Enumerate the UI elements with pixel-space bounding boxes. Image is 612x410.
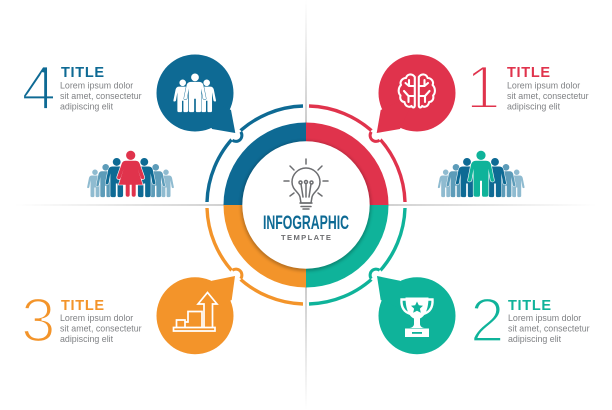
centre white circle — [242, 141, 370, 269]
number 2: 2 — [470, 286, 504, 356]
panel 3: orange section — [21, 276, 235, 356]
description 1: adipiscing elit — [507, 102, 561, 112]
central ring diagram — [207, 106, 405, 304]
description 2: Lorem ipsum dolor — [508, 313, 581, 323]
panel 4: blue section — [22, 54, 235, 133]
description 1 — [507, 81, 589, 112]
description 3: Lorem ipsum dolor — [60, 313, 133, 323]
inner circle shadow — [241, 141, 371, 271]
description 4: adipiscing elit — [60, 102, 114, 112]
outer ring segment: orange — [207, 208, 303, 304]
outer ring segment: blue — [207, 106, 303, 202]
speech bubble: blue — [156, 54, 235, 133]
description 4: sit amet, consectetur — [60, 91, 142, 101]
outer ring segment: teal — [309, 208, 405, 304]
connector: orange — [230, 268, 242, 282]
icon: rising bar chart — [174, 292, 217, 331]
description 2: adipiscing elit — [508, 334, 562, 344]
speech bubble: teal — [377, 276, 456, 354]
description 2 — [508, 313, 590, 344]
thick ring: orange — [223, 205, 306, 288]
title 2: TITLE — [508, 298, 552, 314]
number 4: 4 — [22, 54, 56, 123]
connector: teal — [370, 268, 382, 282]
icon: light bulb — [284, 159, 328, 209]
description 2: sit amet, consectetur — [508, 324, 590, 334]
title 3: TITLE — [61, 298, 105, 314]
title 4: TITLE — [61, 65, 105, 81]
connector: blue — [230, 128, 242, 142]
description 4: Lorem ipsum dolor — [60, 81, 133, 91]
panel 2: teal section — [377, 276, 590, 356]
speech bubble: red — [377, 54, 456, 133]
heading: infographic: INFOGRAPHIC — [263, 213, 349, 234]
icon: brain — [399, 74, 435, 107]
connectors on ring — [230, 128, 382, 282]
description 4 — [60, 81, 142, 112]
vertical divider — [305, 0, 307, 410]
title 1: TITLE — [507, 65, 551, 81]
outer ring segment: red — [309, 106, 405, 202]
speech bubble: orange — [156, 276, 235, 354]
horizontal divider — [15, 204, 597, 206]
description 3 — [60, 313, 142, 344]
description 1: sit amet, consectetur — [507, 91, 589, 101]
thick ring: blue — [224, 122, 306, 205]
number 1: 1 — [466, 54, 500, 123]
people group left with red woman — [87, 151, 174, 197]
icon: three people — [173, 74, 216, 112]
thick ring: teal — [306, 205, 388, 288]
icon: trophy — [401, 298, 433, 337]
number 3: 3 — [21, 286, 55, 356]
description 1: Lorem ipsum dolor — [507, 81, 580, 91]
people group right with teal man — [438, 151, 525, 197]
connector: red — [370, 128, 382, 142]
description 3: sit amet, consectetur — [60, 324, 142, 334]
panel 1: red section — [377, 54, 589, 133]
thick ring: red — [306, 122, 388, 205]
description 3: adipiscing elit — [60, 334, 114, 344]
subheading: template: TEMPLATE — [281, 233, 331, 242]
